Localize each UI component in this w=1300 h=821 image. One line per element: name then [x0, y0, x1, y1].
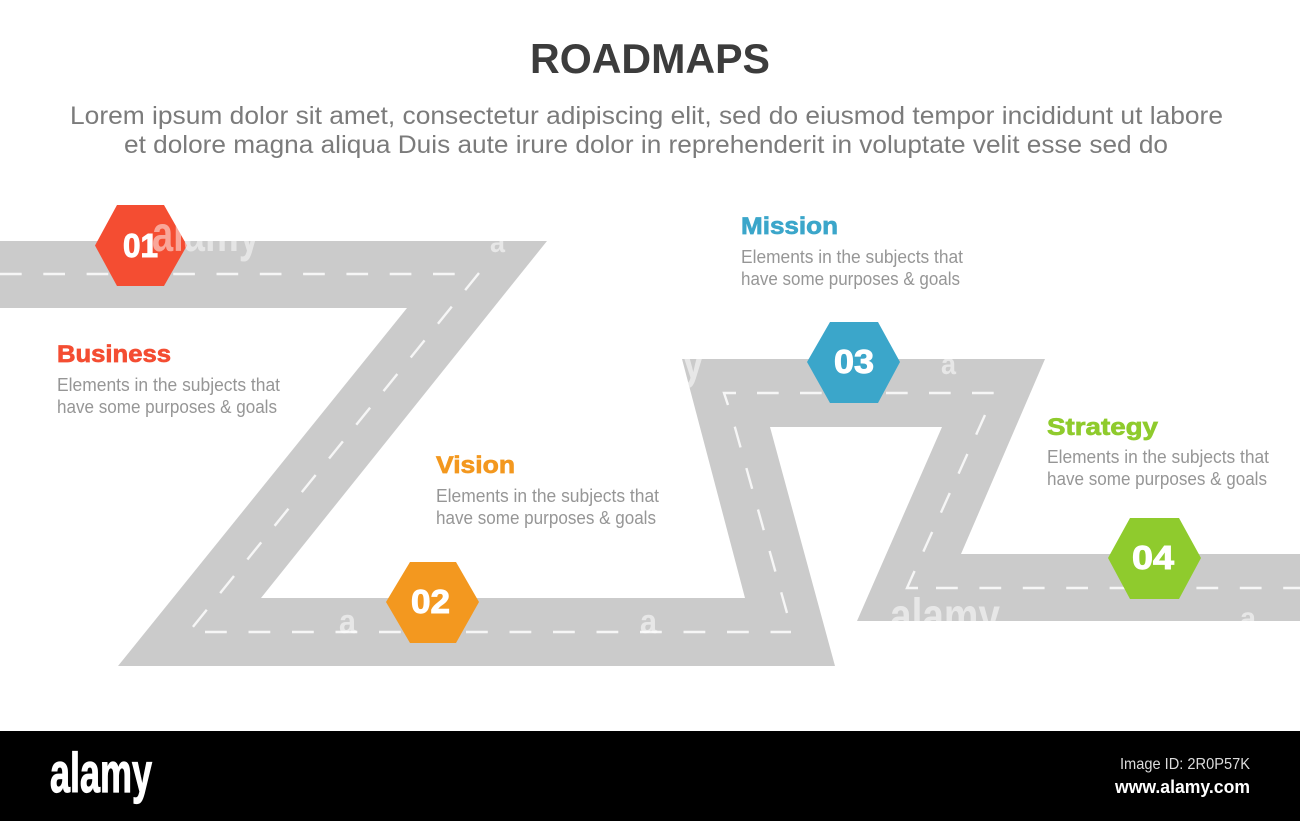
text block: Business: Elements in the subjects that	[57, 375, 280, 395]
text block: Strategy: have some purposes & goals	[1047, 469, 1267, 489]
watermark marks on road: y	[682, 336, 704, 389]
subtitle text: Lorem ipsum dolor sit amet, consectetur adipiscing elit, sed do eiusmod tempor incididunt ut labore	[70, 102, 1223, 130]
marker 01: 01	[123, 227, 158, 264]
text block: Business: Business	[57, 341, 171, 368]
text block: Business: have some purposes & goals	[57, 397, 277, 417]
watermark marks on road: a	[640, 603, 658, 641]
footer bar: Image ID: 2R0P57K	[1120, 756, 1250, 773]
footer bar	[0, 731, 1300, 821]
text block: Mission	[741, 213, 963, 289]
title: ROADMAPS	[530, 35, 770, 82]
text block: Strategy	[1047, 414, 1269, 489]
watermark over marker 01: alamy	[152, 206, 260, 262]
footer bar: www.alamy.com	[1114, 777, 1250, 797]
watermark marks on road: a	[490, 226, 505, 259]
text block: Vision	[436, 452, 659, 528]
text block: Vision: have some purposes & goals	[436, 508, 656, 528]
text block: Business	[57, 341, 280, 417]
marker 01	[95, 205, 187, 286]
text block: Strategy: Elements in the subjects that	[1047, 447, 1269, 467]
winding road	[0, 241, 1300, 666]
watermark marks on road: a	[1240, 602, 1256, 635]
text block: Vision: Vision	[436, 452, 515, 479]
watermark marks on road: a	[941, 348, 956, 381]
marker 03	[807, 322, 900, 403]
watermark marks on road: a	[339, 603, 357, 641]
watermark marks on road: alamy	[890, 590, 1000, 643]
marker 04: 04	[1132, 539, 1175, 576]
marker 02	[386, 562, 479, 643]
marker 04	[1108, 518, 1201, 599]
footer logo: alamy	[50, 741, 152, 804]
watermark marks on road	[339, 226, 1256, 643]
text block: Mission: Mission	[741, 213, 838, 240]
text block: Vision: Elements in the subjects that	[436, 486, 659, 506]
text block: Strategy: Strategy	[1047, 414, 1159, 441]
marker 03: 03	[834, 343, 874, 380]
text block: Mission: have some purposes & goals	[741, 269, 960, 289]
text block: Mission: Elements in the subjects that	[741, 247, 963, 267]
subtitle text: et dolore magna aliqua Duis aute irure dolor in reprehenderit in voluptate velit esse sed do	[124, 131, 1168, 159]
marker 02: 02	[411, 583, 450, 620]
subtitle text	[70, 102, 1223, 159]
